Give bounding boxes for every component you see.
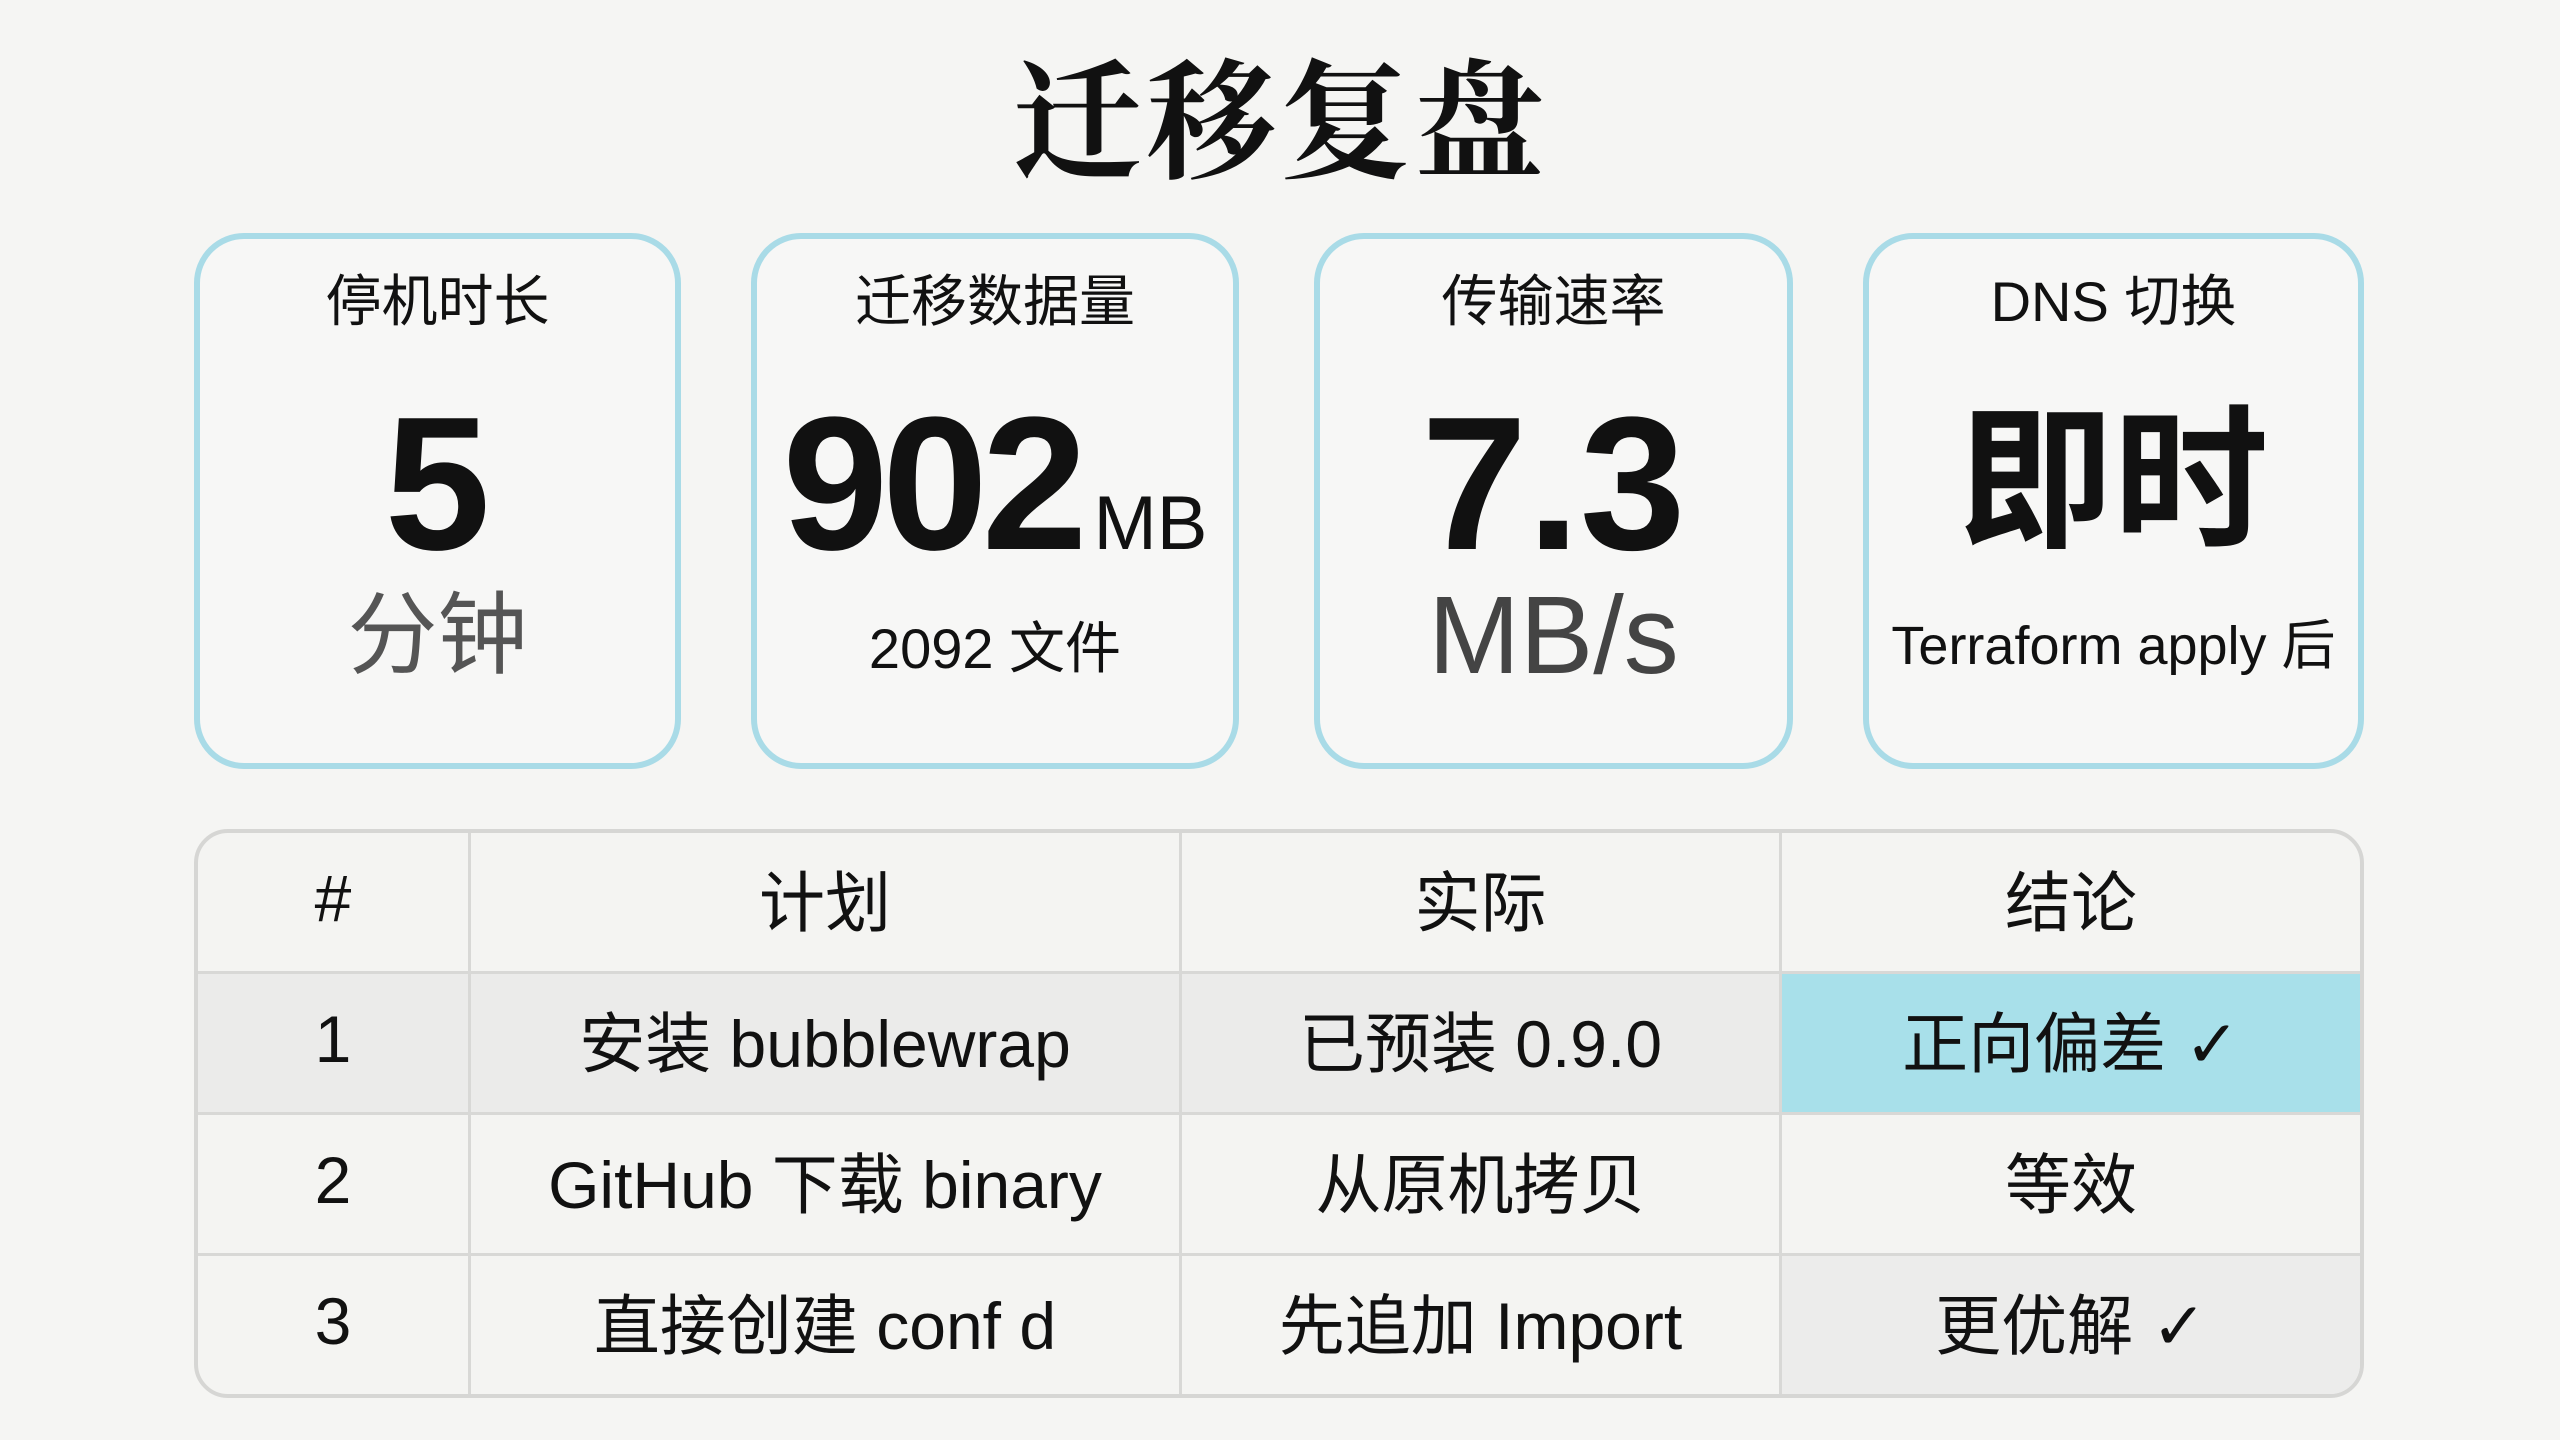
- card: DNS: Terraform apply 后: [1891, 616, 2336, 676]
- table: plan vs actual: 直接创建 conf d: [594, 1289, 1056, 1363]
- card: DNS: [1863, 233, 2364, 769]
- table: plan vs actual: 更优解 ✓: [1935, 1288, 2207, 1365]
- card: data volume: [751, 233, 1239, 769]
- card: downtime: [194, 233, 681, 769]
- table: plan vs actual: 等效: [2005, 1148, 2137, 1222]
- title: 迁移复盘: [1012, 53, 1548, 197]
- card: data volume: 迁移数据量: [855, 270, 1135, 333]
- card: downtime: 5: [385, 378, 490, 590]
- card: data volume: 2092 文件: [869, 617, 1121, 680]
- table: plan vs actual: 安装 bubblewrap: [579, 1007, 1071, 1081]
- card: downtime: 分钟: [348, 586, 528, 686]
- table: plan vs actual: [194, 829, 2364, 1398]
- table: plan vs actual: 3: [315, 1284, 351, 1358]
- card: transfer rate: MB/s: [1428, 574, 1679, 697]
- table: plan vs actual: 1: [315, 1002, 351, 1076]
- table: plan vs actual: #: [315, 861, 351, 935]
- table: plan vs actual: 实际: [1414, 866, 1546, 940]
- card: DNS: 即时: [1958, 395, 2268, 568]
- table: plan vs actual: 计划: [759, 866, 891, 940]
- card: data volume: 902MB: [782, 378, 1208, 590]
- table: plan vs actual: 2: [315, 1143, 351, 1217]
- table: plan vs actual: 已预装 0.9.0: [1299, 1007, 1662, 1081]
- card: transfer rate: 7.3: [1421, 378, 1686, 590]
- table: plan vs actual: GitHub 下载 binary: [548, 1148, 1102, 1222]
- table: plan vs actual: 结论: [2005, 866, 2137, 940]
- card: transfer rate: 传输速率: [1442, 270, 1666, 333]
- card: downtime: 停机时长: [326, 270, 550, 333]
- card: DNS: DNS 切换: [1991, 270, 2236, 333]
- table: plan vs actual: 正向偏差 ✓: [1902, 1006, 2240, 1083]
- table: plan vs actual: 从原机拷贝: [1316, 1148, 1646, 1222]
- card: transfer rate: [1314, 233, 1793, 769]
- table: plan vs actual: 先追加 Import: [1279, 1289, 1682, 1363]
